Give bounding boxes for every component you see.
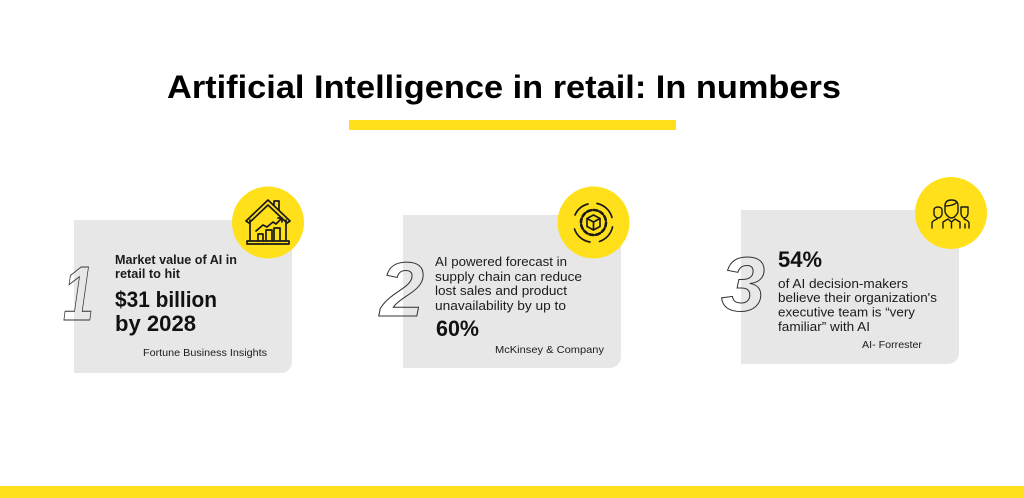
text: market value — [115, 253, 237, 336]
text: market value: by 2028 — [115, 311, 196, 336]
text: executive familiarity: familiar” with AI — [778, 320, 870, 334]
source: McKinsey & Company: McKinsey & Company — [495, 344, 605, 356]
title: Artificial Intelligence in retail: In numbers — [167, 69, 841, 105]
icon: team of three people — [915, 177, 987, 249]
text: supply chain forecast: supply chain can reduce — [435, 270, 582, 284]
text: supply chain forecast: 60% — [436, 316, 479, 341]
panel: executive familiarity — [721, 177, 987, 364]
icon: gear with box and cycle arrows — [558, 186, 630, 258]
panel: market value — [63, 186, 304, 373]
footer bar — [0, 486, 1024, 498]
card background 3 — [741, 210, 959, 364]
text: executive familiarity: executive team is “very — [778, 306, 916, 320]
numeral 1: 1 — [63, 251, 94, 337]
text: executive familiarity: believe their organization's — [778, 291, 937, 305]
text: executive familiarity — [778, 247, 937, 334]
text: supply chain forecast: lost sales and product — [435, 284, 568, 298]
text: supply chain forecast: AI powered forecast in — [435, 255, 567, 269]
card background 1 — [74, 220, 292, 373]
text: market value: Market value of AI in — [115, 253, 237, 267]
text: supply chain forecast: unavailability by up to — [435, 299, 566, 313]
source: AI- Forrester: AI- Forrester — [862, 339, 922, 351]
text: market value: $31 billion — [115, 287, 217, 312]
text: supply chain forecast — [435, 255, 582, 341]
numeral 3: 3 — [721, 242, 765, 328]
text: executive familiarity: 54% — [778, 247, 822, 272]
title underline — [349, 120, 676, 130]
text: executive familiarity: of AI decision-makers — [778, 277, 908, 291]
numeral 2: 2 — [378, 247, 424, 333]
source: Fortune Business Insights: Fortune Business Insights — [143, 347, 267, 359]
panel: supply chain forecast — [378, 186, 630, 368]
text: market value: retail to hit — [115, 267, 181, 281]
card background 2 — [403, 215, 621, 368]
icon: house with rising chart — [232, 186, 304, 258]
